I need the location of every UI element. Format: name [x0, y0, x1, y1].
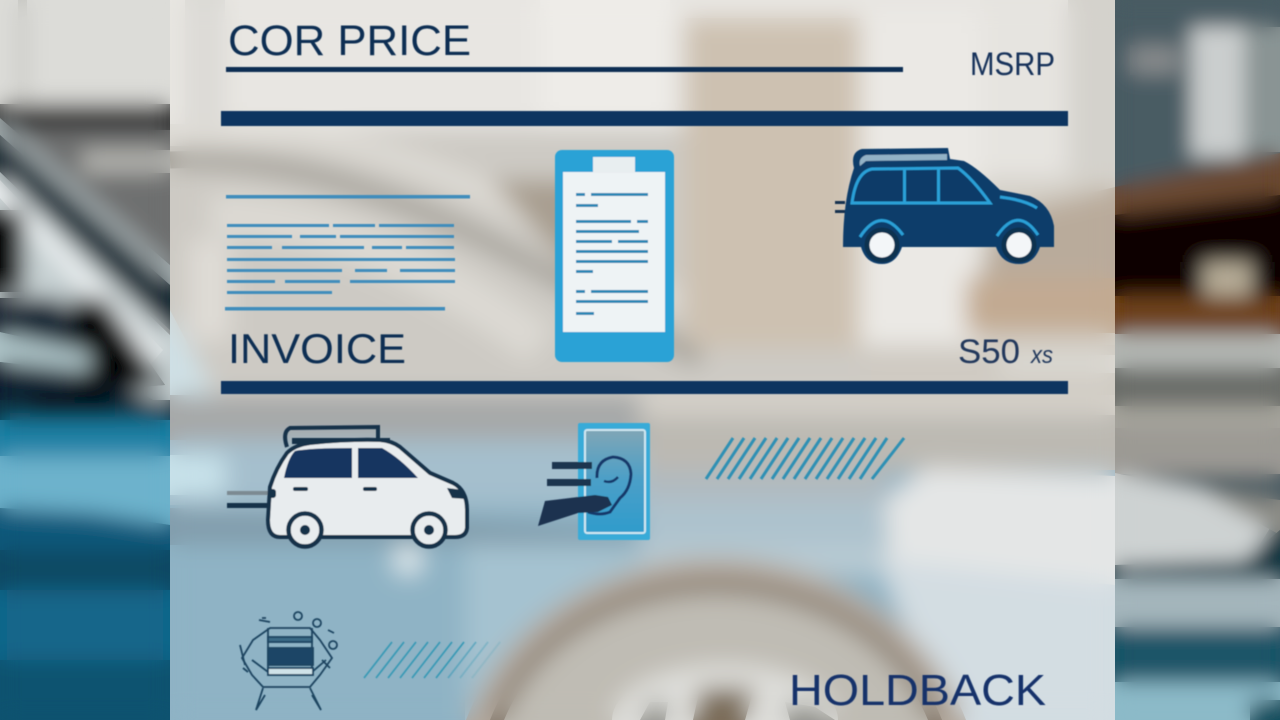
- background left: blurred car window and door: [0, 0, 170, 720]
- label: INVOICE: INVOICE: [228, 325, 406, 372]
- label: S50 price: S50: [958, 333, 1020, 371]
- icon: dark blue SUV: [835, 148, 1054, 264]
- label: MSRP: MSRP: [970, 46, 1055, 82]
- background centre: panel over showroom: [170, 0, 1115, 720]
- icon: white car: [227, 427, 467, 546]
- middle divider bar: [221, 381, 1068, 394]
- background right: showroom and car hood: [1115, 0, 1280, 720]
- title underline: [226, 67, 903, 72]
- icon: hand with card: [538, 423, 650, 540]
- hatching: upper right: [706, 438, 904, 479]
- foreground content: [221, 17, 1068, 715]
- label: HOLDBACK: HOLDBACK: [789, 666, 1046, 715]
- wheel arch: [466, 558, 966, 720]
- icon: clipboard document: [555, 150, 674, 362]
- heading: COR PRICE: COR PRICE: [228, 17, 471, 65]
- hatching: lower left: [364, 642, 500, 678]
- label: price suffix: xs: [1030, 342, 1053, 369]
- top divider bar: [221, 111, 1068, 126]
- icon: seat with scattered items: [240, 612, 337, 710]
- text block: placeholder lines: [225, 195, 470, 310]
